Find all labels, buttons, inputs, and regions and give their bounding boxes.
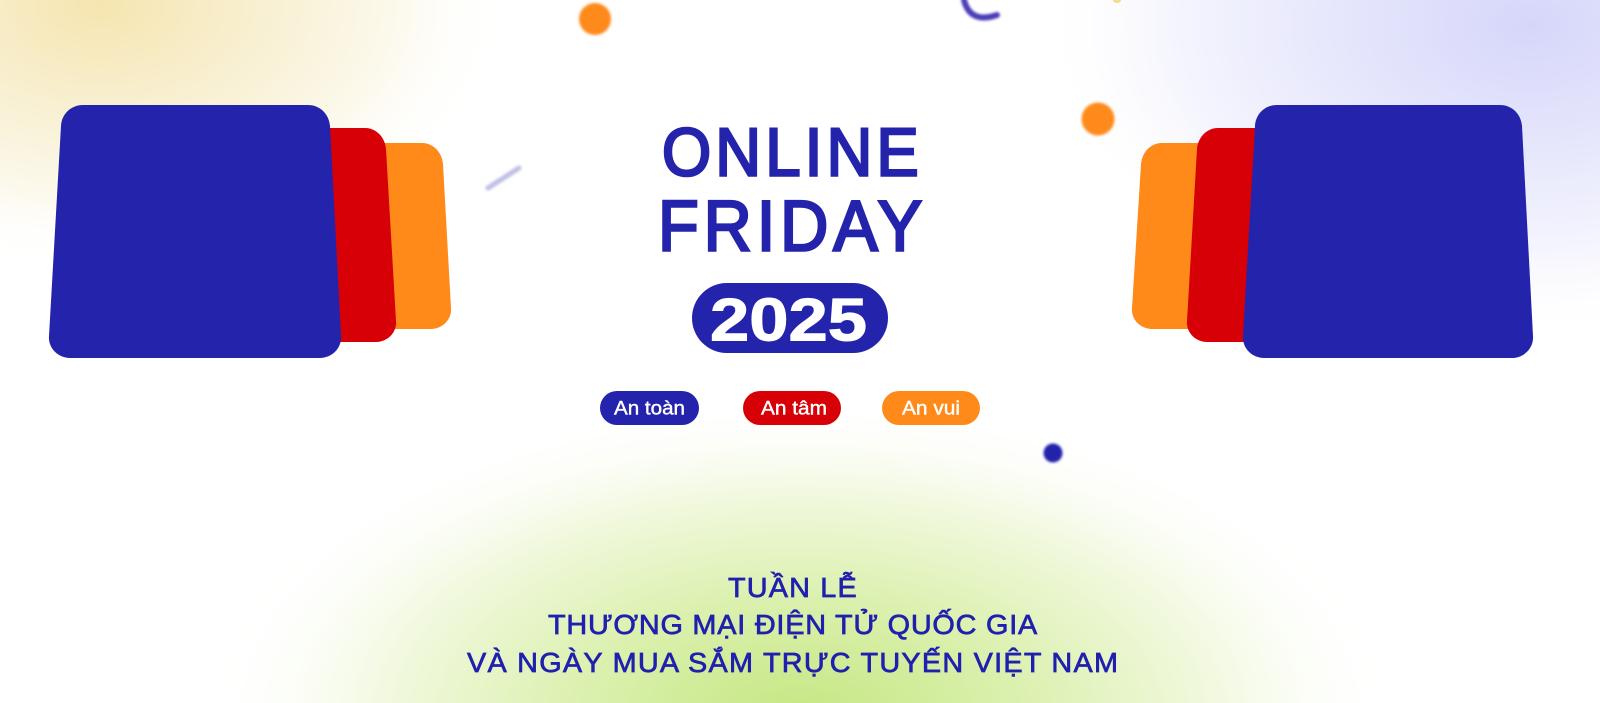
decoration: slash [488,168,519,188]
right blue card [1243,105,1533,358]
tag pills [600,391,980,425]
decoration: orange dot top [579,3,611,35]
decorative shapes [488,0,1121,462]
right red card [1187,128,1300,342]
tag: An vui: An vui [902,398,960,420]
tag: An tâm [743,391,841,425]
heading line 1: TUẦN LỄ [728,572,857,604]
left orange card [370,143,451,329]
tag: An toàn [600,391,699,425]
title [658,114,922,266]
decoration: orange dot right [1082,102,1114,136]
tag: An tâm: An tâm [761,398,827,420]
tag: An toàn: An toàn [614,398,685,420]
bottom heading [467,572,1118,679]
title line: ONLINE: ONLINE [662,114,919,190]
left red card [300,128,396,342]
year pill [692,283,888,353]
year text: 2025 [710,286,867,354]
heading line 3: VÀ NGÀY MUA SẮM TRỰC TUYẾN VIỆT NAM [467,647,1118,679]
left blue card [49,105,341,358]
decoration: yellow speck [1113,0,1121,3]
heading line 2: THƯƠNG MẠI ĐIỆN TỬ QUỐC GIA [548,608,1037,641]
left card stack [49,105,451,358]
tag: An vui [882,391,980,425]
decoration: blue dot [1044,444,1062,462]
right card stack [1132,105,1533,358]
title line: FRIDAY: FRIDAY [658,187,922,266]
right orange card [1132,143,1200,329]
decoration: arc [964,0,997,17]
year badge [692,283,888,354]
